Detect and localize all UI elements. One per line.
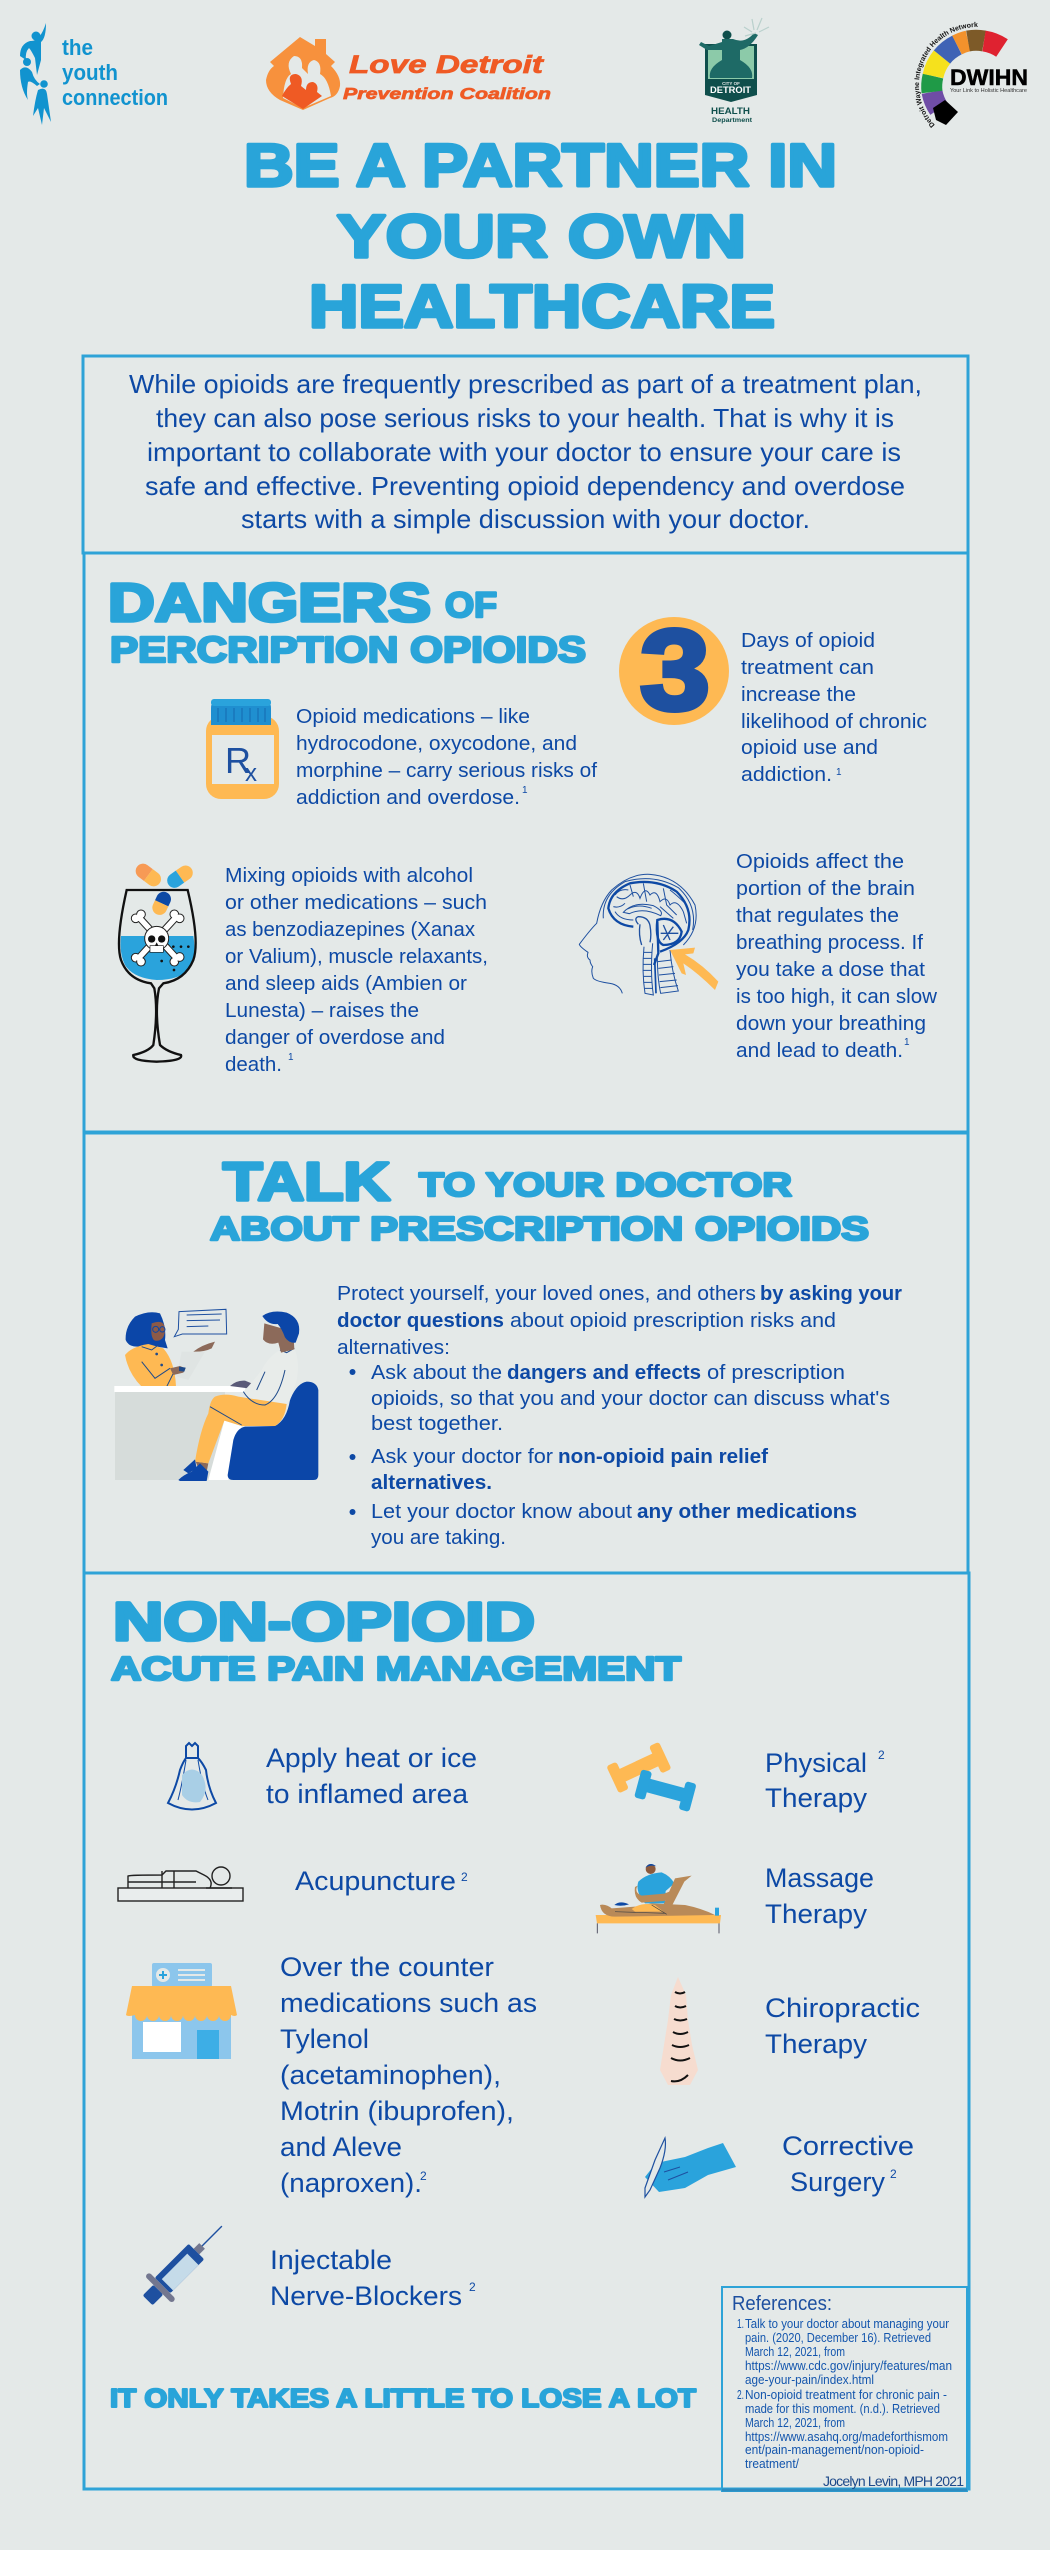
text: opioid medications: addiction and overdose. xyxy=(296,787,520,809)
text: opioids affect brain: down your breathing xyxy=(736,1013,926,1035)
icon: spine xyxy=(660,1977,698,2085)
panel: non-opioid acute pain management xyxy=(84,1573,969,2489)
text: three days: Days of opioid xyxy=(741,630,875,652)
logo: city of detroit health department xyxy=(699,18,769,124)
icon: black puzzle piece xyxy=(933,100,958,125)
heading: dangers: OF xyxy=(445,586,497,625)
logo tagline: Your Link to Holistic Healthcare xyxy=(950,88,1027,94)
references list: treatment/ xyxy=(745,2457,799,2471)
references list: age-your-pain/index.html xyxy=(745,2373,874,2387)
bullet list: dangers and effects xyxy=(507,1362,701,1384)
text: mixing opioids: as benzodiazepines (Xanax xyxy=(225,919,475,941)
panel: introduction xyxy=(83,356,968,553)
text: three days xyxy=(741,630,927,786)
circular network name: Detroit Wayne Integrated Health Network xyxy=(914,22,978,128)
text: three days: addiction. xyxy=(741,764,832,786)
text: three days: increase the xyxy=(741,684,856,706)
item: acupuncture: 2 xyxy=(461,1870,468,1884)
references list: 1. xyxy=(737,2317,744,2331)
item: corrective surgery: Corrective xyxy=(782,2131,914,2161)
bullet list: Ask about the xyxy=(371,1362,502,1384)
text: opioids affect brain: you take a dose that xyxy=(736,959,925,981)
logo wordmark: Prevention Coalition xyxy=(343,86,551,103)
item: over the counter medications: Motrin (ibuprofen), xyxy=(280,2096,514,2126)
text: opioid medications: 1 xyxy=(522,785,528,796)
references list: Talk to your doctor about managing your xyxy=(745,2317,949,2331)
item: over the counter medications: Over the counter xyxy=(280,1952,494,1982)
bullet list: of prescription xyxy=(707,1362,845,1384)
title xyxy=(244,132,837,340)
text: opioid medications xyxy=(296,706,597,809)
text: opioids affect brain: that regulates the xyxy=(736,905,899,927)
icon: massage therapy xyxy=(596,1864,721,1933)
item: massage therapy: Therapy xyxy=(765,1899,868,1929)
item: acupuncture: Acupuncture xyxy=(295,1866,456,1896)
item: over the counter medications: (acetaminophen), xyxy=(280,2060,501,2090)
icon: climbing figures xyxy=(20,23,51,125)
item: heat or ice: Apply heat or ice xyxy=(266,1743,477,1773)
logo: the youth connection xyxy=(20,23,168,125)
icon: puzzle arc xyxy=(932,40,1002,109)
text: opioids affect brain: portion of the brain xyxy=(736,878,915,900)
logo wordmark: the xyxy=(62,35,93,60)
logo wordmark: DWIHN xyxy=(950,65,1028,90)
item: over the counter medications: (naproxen). xyxy=(280,2168,422,2198)
icon: syringe xyxy=(134,2213,235,2314)
references list: made for this moment. (n.d.). Retrieved xyxy=(745,2402,940,2416)
references list: March 12, 2021, from xyxy=(745,2416,845,2430)
item: heat or ice: to inflamed area xyxy=(266,1779,469,1809)
text: opioids affect brain: is too high, it can slow xyxy=(736,986,938,1008)
text: opioids affect brain: Opioids affect the xyxy=(736,851,904,873)
text: protect yourself xyxy=(337,1283,902,1359)
logo wordmark xyxy=(62,35,168,110)
text: protect yourself: doctor questions xyxy=(337,1310,504,1332)
text: protect yourself: alternatives: xyxy=(337,1337,450,1359)
icon: pill bottle: x xyxy=(245,760,257,787)
icon: wine glass with skull xyxy=(119,861,196,1062)
item: heat or ice xyxy=(266,1743,477,1809)
text: opioids affect brain xyxy=(736,851,938,1062)
title: YOUR OWN xyxy=(337,203,746,270)
heading: non-opioid: ACUTE PAIN MANAGEMENT xyxy=(111,1650,681,1687)
text: mixing opioids: 1 xyxy=(288,1052,294,1063)
heading: talk: ABOUT PRESCRIPTION OPIOIDS xyxy=(210,1211,869,1248)
item: massage therapy xyxy=(765,1863,874,1929)
intro text: important to collaborate with your doctor to ensure your care is xyxy=(147,437,901,467)
text: mixing opioids xyxy=(225,865,488,1076)
tagline: IT ONLY TAKES A LITTLE TO LOSE A LOT xyxy=(110,2385,696,2413)
logo wordmark: HEALTH xyxy=(711,106,750,117)
text: mixing opioids: and sleep aids (Ambien or xyxy=(225,973,467,995)
item: over the counter medications: and Aleve xyxy=(280,2132,402,2162)
heading: dangers: PERCRIPTION OPIOIDS xyxy=(110,629,586,670)
logo: dwihn xyxy=(914,22,1028,128)
references list: https://www.asahq.org/madeforthismom xyxy=(745,2430,948,2444)
bullet list: non-opioid pain relief xyxy=(558,1446,768,1468)
logo wordmark: Love Detroit xyxy=(349,51,545,79)
icon: spirit of detroit shield: CITY OF xyxy=(722,81,740,86)
text: three days: likelihood of chronic xyxy=(741,711,927,733)
logo wordmark: Department xyxy=(712,118,752,124)
heading: dangers: DANGERS xyxy=(108,573,431,633)
item: massage therapy: Massage xyxy=(765,1863,874,1893)
logo wordmark: youth xyxy=(62,60,118,85)
text: three days: opioid use and xyxy=(741,737,878,759)
bullet list: best together. xyxy=(371,1413,503,1435)
icon: gloved hand with scalpel xyxy=(645,2138,736,2197)
item: physical therapy xyxy=(765,1748,885,1813)
icon: brain with arrow xyxy=(579,874,718,995)
bullet list: alternatives. xyxy=(371,1472,492,1494)
item: over the counter medications xyxy=(280,1952,537,2198)
item: injectable nerve-blockers xyxy=(270,2245,476,2311)
text: mixing opioids: or other medications – such xyxy=(225,892,487,914)
item: chiropractic therapy: Chiropractic xyxy=(765,1993,920,2023)
item: injectable nerve-blockers: Injectable xyxy=(270,2245,392,2275)
author credit: Jocelyn Levin, MPH 2021 xyxy=(823,2473,964,2489)
item: physical therapy: 2 xyxy=(878,1748,885,1762)
item: corrective surgery: Surgery xyxy=(790,2167,885,2197)
icon: spirit of detroit shield xyxy=(699,18,769,102)
text: opioid medications: hydrocodone, oxycodone, and xyxy=(296,733,577,755)
item: corrective surgery xyxy=(782,2131,914,2197)
text: mixing opioids: or Valium), muscle relaxants, xyxy=(225,946,488,968)
references list: 2. xyxy=(737,2388,744,2402)
item: corrective surgery: 2 xyxy=(890,2167,897,2181)
intro text: While opioids are frequently prescribed as part of a treatment plan, xyxy=(129,369,922,399)
heading: talk: TO YOUR DOCTOR xyxy=(419,1167,792,1204)
bullet list: Let your doctor know about xyxy=(371,1501,632,1523)
references list xyxy=(737,2317,952,2471)
intro text xyxy=(129,369,922,534)
bullet list: you are taking. xyxy=(371,1527,506,1549)
text: opioids affect brain: and lead to death. xyxy=(736,1040,903,1062)
references heading: References: xyxy=(732,2293,832,2315)
intro text: they can also pose serious risks to your health. That is why it is xyxy=(156,403,894,433)
callout: number 3: 3 xyxy=(640,607,710,734)
text: opioids affect brain: 1 xyxy=(904,1037,910,1048)
item: physical therapy: Physical xyxy=(765,1748,867,1778)
logo wordmark xyxy=(343,51,551,103)
icon: dumbbells xyxy=(606,1742,697,1812)
item: injectable nerve-blockers: Nerve-Blockers xyxy=(270,2281,462,2311)
references list: pain. (2020, December 16). Retrieved xyxy=(745,2331,931,2345)
intro text: safe and effective. Preventing opioid dependency and overdose xyxy=(145,471,905,501)
references list: ent/pain-management/non-opioid- xyxy=(745,2443,924,2457)
heading: talk xyxy=(210,1152,869,1248)
icon: pharmacy storefront xyxy=(126,1963,237,2059)
logo wordmark: connection xyxy=(62,85,168,110)
heading: dangers xyxy=(108,573,586,670)
text: protect yourself: by asking your xyxy=(760,1283,902,1305)
heading: talk: TALK xyxy=(223,1152,390,1212)
text: opioids affect brain: breathing process. If xyxy=(736,932,923,954)
icon: ice bag xyxy=(168,1743,216,1810)
text: mixing opioids: danger of overdose and xyxy=(225,1027,445,1049)
item: over the counter medications: Tylenol xyxy=(280,2024,369,2054)
bullet list: opioids, so that you and your doctor can discuss what's xyxy=(371,1388,890,1410)
item: over the counter medications: medications such as xyxy=(280,1988,537,2018)
item: physical therapy: Therapy xyxy=(765,1783,868,1813)
text: three days: treatment can xyxy=(741,657,874,679)
icon: house and family xyxy=(266,37,340,110)
panel: dangers of prescription opioids xyxy=(84,553,968,1132)
text: mixing opioids: Mixing opioids with alcohol xyxy=(225,865,473,887)
icon: acupuncture table xyxy=(118,1867,243,1901)
item: over the counter medications: 2 xyxy=(420,2169,427,2183)
text: mixing opioids: Lunesta) – raises the xyxy=(225,1000,419,1022)
logo wordmark xyxy=(711,106,752,124)
references list: March 12, 2021, from xyxy=(745,2345,845,2359)
intro text: starts with a simple discussion with your doctor. xyxy=(241,504,810,534)
item: chiropractic therapy xyxy=(765,1993,920,2059)
references list: https://www.cdc.gov/injury/features/man xyxy=(745,2359,952,2373)
text: mixing opioids: death. xyxy=(225,1054,282,1076)
title: HEALTHCARE xyxy=(309,273,775,340)
bullet list: Ask your doctor for xyxy=(371,1446,553,1468)
text: opioid medications: morphine – carry serious risks of xyxy=(296,760,597,782)
illustration: doctor and patient xyxy=(114,1309,318,1481)
text: opioid medications: Opioid medications – like xyxy=(296,706,530,728)
icon: pill bottle xyxy=(206,699,279,799)
references list: Non-opioid treatment for chronic pain - xyxy=(745,2388,947,2402)
icon: spirit of detroit shield: DETROIT xyxy=(710,85,752,95)
bullet list: any other medications xyxy=(637,1501,857,1523)
bullet list xyxy=(350,1362,890,1549)
callout: number 3 xyxy=(619,607,729,734)
item: injectable nerve-blockers: 2 xyxy=(469,2280,476,2294)
panel: talk to your doctor xyxy=(84,1133,968,1573)
item: chiropractic therapy: Therapy xyxy=(765,2029,868,2059)
title: BE A PARTNER IN xyxy=(244,132,837,199)
heading: non-opioid xyxy=(111,1592,681,1687)
logo: love detroit prevention coalition xyxy=(266,37,551,110)
heading: non-opioid: NON-OPIOID xyxy=(113,1592,535,1652)
text: protect yourself: about opioid prescription risks and xyxy=(510,1310,836,1332)
text: three days: 1 xyxy=(836,767,842,778)
icon: pill bottle: R xyxy=(225,740,251,781)
panel: references xyxy=(722,2287,967,2491)
text: protect yourself: Protect yourself, your loved ones, and others xyxy=(337,1283,756,1305)
